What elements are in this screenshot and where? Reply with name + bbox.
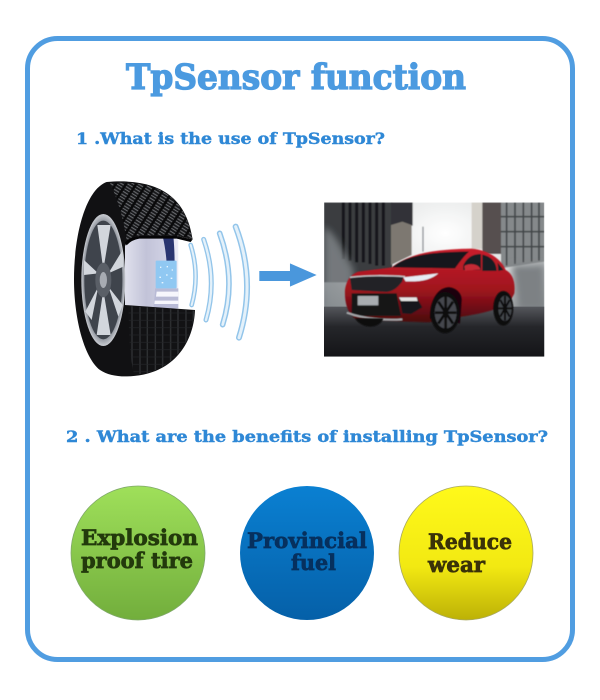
benefit: explosion proof tire: Explosion: [81, 525, 198, 550]
tire tread and sidewall: [74, 181, 195, 376]
photo: red SUV in city: [324, 202, 544, 357]
city background: [324, 202, 544, 357]
car body: [345, 249, 515, 322]
benefit: reduce wear: wear: [427, 552, 486, 577]
benefit: explosion proof tire: proof tire: [81, 548, 193, 573]
alloy wheel: [81, 214, 125, 346]
tire inner cutaway: [125, 236, 178, 309]
car wheels: [355, 287, 513, 333]
wet road: [324, 307, 544, 357]
benefit: explosion proof tire: [71, 486, 205, 620]
arrow: [259, 263, 317, 287]
benefit: reduce wear: Reduce: [428, 529, 512, 554]
heading: question 1: 1 .What is the use of TpSensor?: [76, 129, 385, 148]
benefit: provincial fuel: Provincial: [247, 528, 367, 553]
heading: question 2: 2 . What are the benefits of installing TpSensor?: [66, 427, 548, 446]
benefit: provincial fuel: [240, 486, 374, 620]
sensor: [156, 261, 177, 288]
benefit: reduce wear: [399, 486, 533, 620]
benefit: provincial fuel: fuel: [291, 550, 336, 575]
title: TpSensor function: [126, 57, 466, 98]
illustration: tire with sensor: [74, 181, 317, 376]
signal waves: [191, 227, 247, 338]
